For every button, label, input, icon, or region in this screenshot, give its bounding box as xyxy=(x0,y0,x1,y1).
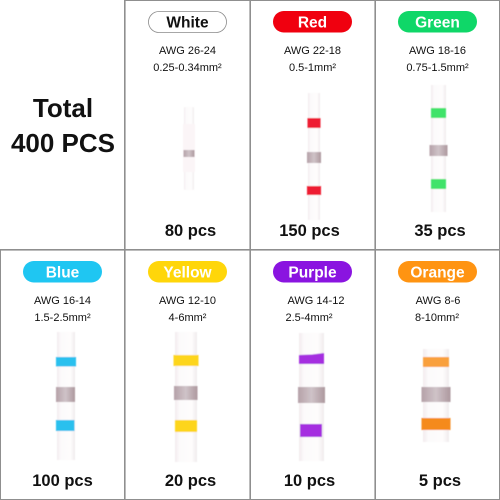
panel: green connector xyxy=(398,11,477,240)
spec: purple gauge xyxy=(285,295,345,324)
spec: green gauge: AWG 18-16 xyxy=(409,45,466,57)
count: 80 pcs: 80 pcs xyxy=(165,222,216,240)
spec: red gauge: 0.5-1mm² xyxy=(289,62,336,74)
spec: green gauge xyxy=(406,45,469,74)
spec: yellow gauge: AWG 12-10 xyxy=(159,295,216,307)
label: White xyxy=(148,12,226,32)
label: Green xyxy=(398,11,477,32)
spec: purple gauge: 2.5-4mm² xyxy=(285,312,333,324)
count: 100 pcs: 100 pcs xyxy=(32,472,93,490)
spec: red gauge xyxy=(284,45,341,74)
spec: yellow gauge: 4-6mm² xyxy=(169,312,207,324)
spec: orange gauge: 8-10mm² xyxy=(415,312,459,324)
spec: purple gauge: AWG 14-12 xyxy=(287,295,345,307)
panel: blue connector xyxy=(23,261,102,490)
label: Blue: Blue xyxy=(46,264,80,282)
icon: purple connector tube xyxy=(298,333,325,461)
label: Red xyxy=(273,11,352,32)
icon: white connector tube xyxy=(183,107,195,190)
count: 10 pcs: 10 pcs xyxy=(284,472,335,490)
icon: green connector tube xyxy=(430,85,448,212)
icon: yellow connector tube xyxy=(174,332,198,462)
label: Green: Green xyxy=(415,14,460,32)
icon: red connector tube xyxy=(307,93,321,220)
label: Yellow: Yellow xyxy=(163,264,213,282)
label: Red: Red xyxy=(298,14,327,32)
heading: total count xyxy=(11,93,115,158)
count: 35 pcs: 35 pcs xyxy=(414,222,466,240)
panel: white connector xyxy=(148,12,226,240)
spec: yellow gauge xyxy=(159,295,216,324)
label: Purple: Purple xyxy=(288,264,337,282)
spec: green gauge: 0.75-1.5mm² xyxy=(406,62,469,74)
label: Blue xyxy=(23,261,102,282)
count: 20 pcs: 20 pcs xyxy=(165,472,216,490)
count: 150 pcs: 150 pcs xyxy=(279,222,340,240)
heading: total count: 400 PCS xyxy=(11,128,115,158)
spec: red gauge: AWG 22-18 xyxy=(284,45,341,57)
panel: orange connector xyxy=(398,261,477,490)
icon: orange connector tube xyxy=(422,349,450,442)
panel: purple connector xyxy=(273,261,352,490)
panel: yellow connector xyxy=(148,261,227,490)
count: 5 pcs: 5 pcs xyxy=(419,472,461,490)
heading: total count: Total xyxy=(33,93,93,123)
label: Orange: Orange xyxy=(410,264,465,282)
label: White: White xyxy=(166,14,209,32)
label: Yellow xyxy=(148,261,227,282)
spec: orange gauge: AWG 8-6 xyxy=(416,295,460,307)
spec: orange gauge xyxy=(415,295,460,324)
spec: blue gauge: 1.5-2.5mm² xyxy=(34,312,91,324)
spec: white gauge xyxy=(153,45,222,74)
label: Orange xyxy=(398,261,477,282)
label: Purple xyxy=(273,261,352,282)
spec: white gauge: AWG 26-24 xyxy=(159,45,216,57)
spec: blue gauge: AWG 16-14 xyxy=(34,295,91,307)
icon: blue connector tube xyxy=(56,332,76,460)
spec: blue gauge xyxy=(34,295,91,324)
spec: white gauge: 0.25-0.34mm² xyxy=(153,62,222,74)
panel: red connector xyxy=(273,11,352,240)
